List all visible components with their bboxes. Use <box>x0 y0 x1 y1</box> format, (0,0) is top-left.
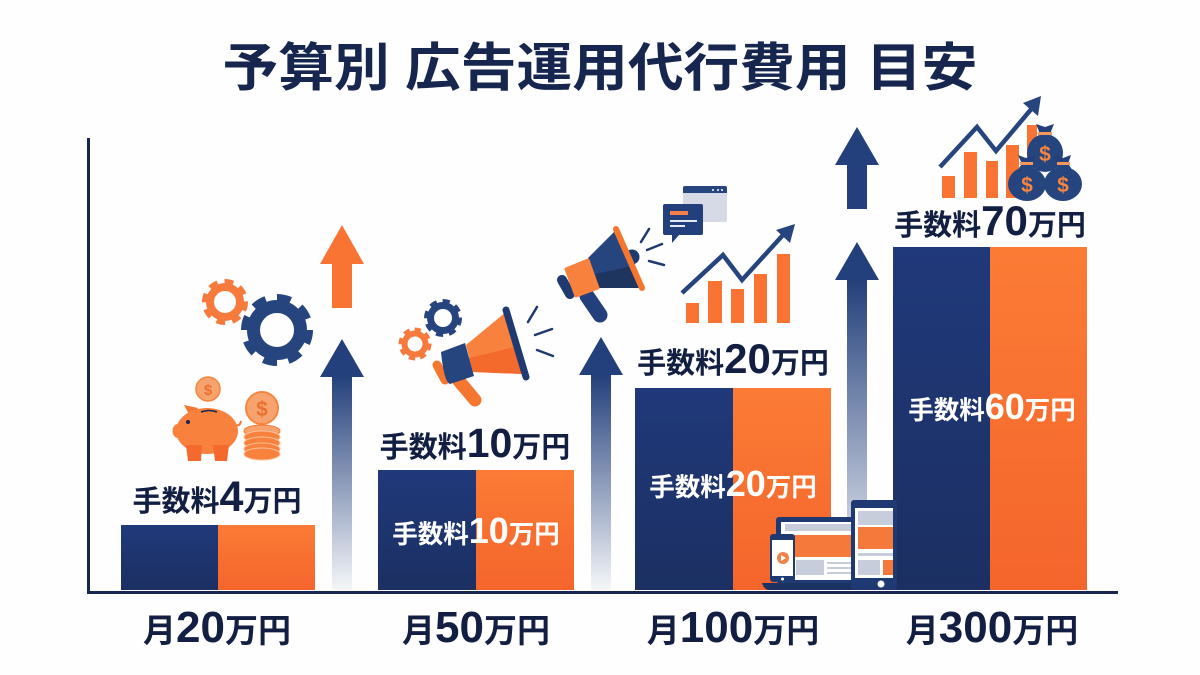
bar label: 手数料20万円: 手数料20万円 <box>649 463 817 504</box>
top label: 手数料70万円: 手数料70万円 <box>894 197 1086 244</box>
axis label: 月50万円: 月50万円 <box>402 603 550 652</box>
arrow: navy up <box>835 127 879 209</box>
arrow: gradient 3 <box>835 242 879 590</box>
icon: navy gear large <box>246 299 308 361</box>
icon: responsive devices <box>762 500 897 590</box>
arrow: gradient 1 <box>320 339 364 590</box>
bar label: 手数料10万円: 手数料10万円 <box>392 510 560 551</box>
top label: 手数料4万円: 手数料4万円 <box>133 473 301 521</box>
axis label: 月20万円: 月20万円 <box>143 603 291 652</box>
icon: orange gear small <box>400 330 430 358</box>
icon: browser window <box>683 186 727 222</box>
top label: 手数料10万円: 手数料10万円 <box>380 420 570 466</box>
bars: 月300万円 <box>893 247 1087 590</box>
icon: piggy bank with coins: $ <box>204 382 213 399</box>
icon: money bags: $ <box>1021 174 1033 197</box>
icon: growth chart 月100万円 <box>682 224 795 323</box>
icon: orange megaphone <box>437 307 553 400</box>
axis label: 月300万円: 月300万円 <box>906 603 1078 652</box>
icon: navy gear small <box>426 302 460 334</box>
bars: 月100万円 <box>635 388 831 590</box>
icon: navy megaphone <box>562 229 664 315</box>
axis label: 月100万円: 月100万円 <box>647 603 819 652</box>
title: 予算別 広告運用代行費用 目安 <box>222 40 978 98</box>
icon: piggy bank with coins: $ <box>256 398 268 421</box>
icon: money bags <box>1008 124 1082 201</box>
icon: money bags: $ <box>1057 174 1069 197</box>
icon: money bags: $ <box>1039 143 1051 166</box>
arrow: orange up <box>320 225 364 308</box>
icon: piggy bank with coins <box>172 377 280 461</box>
icon: chat bubble <box>663 204 703 243</box>
chart axes <box>88 138 1118 592</box>
arrow: gradient 2 <box>579 337 623 590</box>
bars: 月20万円 <box>121 525 315 590</box>
icon: orange gear large <box>205 282 245 322</box>
top label: 手数料20万円: 手数料20万円 <box>637 335 829 382</box>
bars: 月50万円 <box>378 470 574 590</box>
bar label: 手数料60万円: 手数料60万円 <box>908 386 1076 427</box>
icon: growth chart 月300万円 <box>940 96 1041 198</box>
